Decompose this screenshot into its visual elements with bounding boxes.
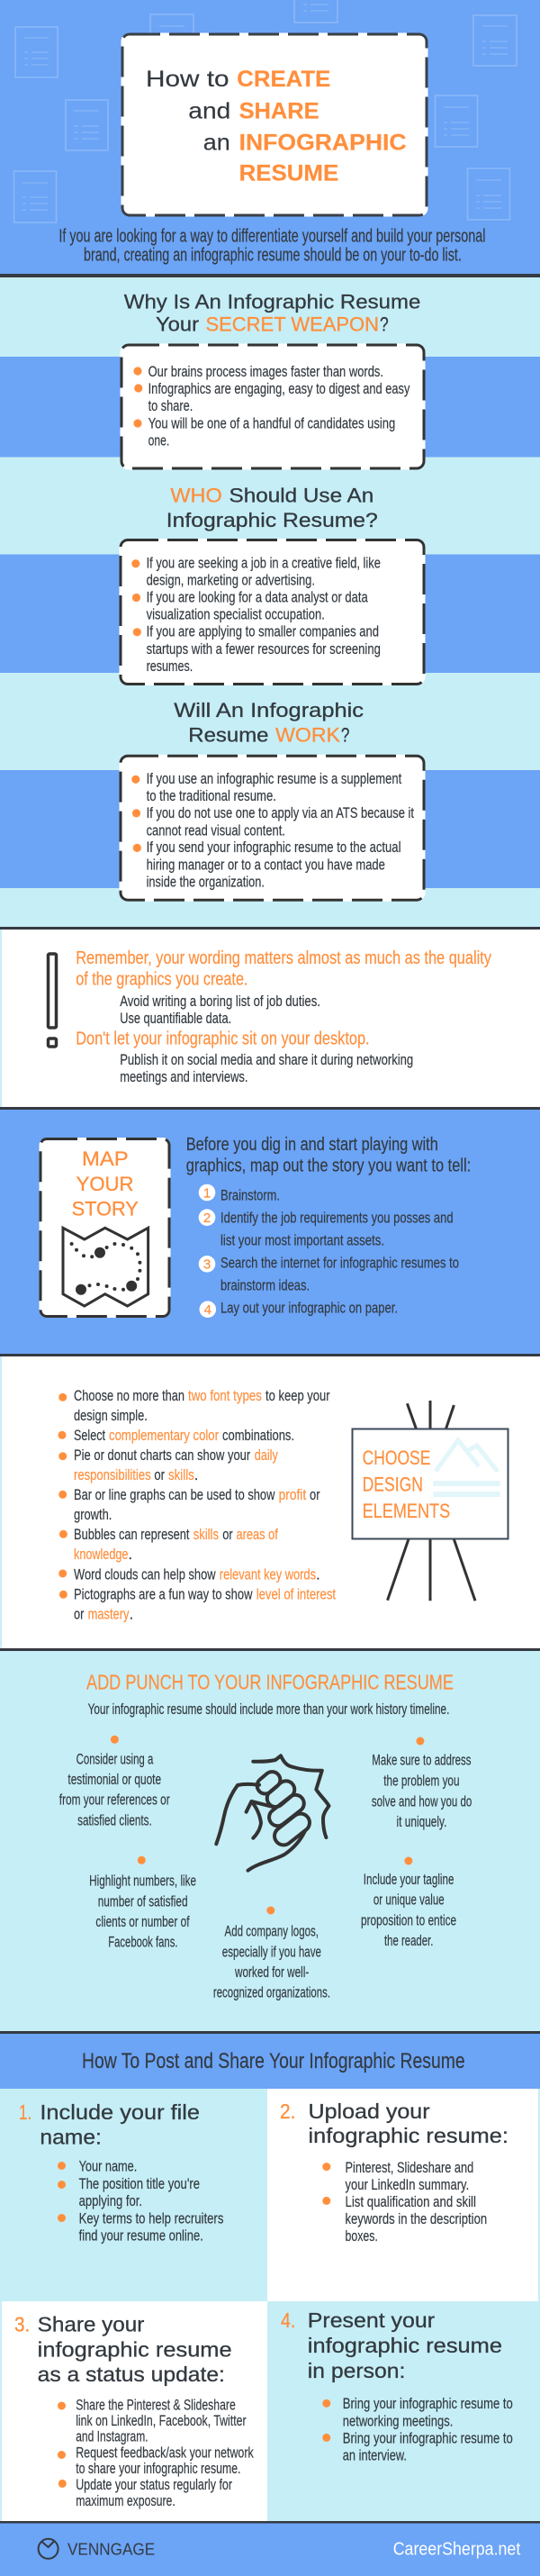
list text: Update your status regularly for: [76, 2476, 232, 2493]
callout: tagline: Include your tagline: [364, 1871, 454, 1888]
title: RESUME: [239, 160, 338, 186]
heading: map your story: MAP: [82, 1147, 129, 1170]
number badges: 4: [204, 1302, 212, 1318]
text block: wording reminder: Avoid writing a boring list of job duties.: [120, 993, 320, 1010]
step heading: [14, 2313, 232, 2386]
list text: If you use an infographic resume is a supplement: [147, 770, 401, 787]
list text: your LinkedIn summary.: [346, 2176, 469, 2193]
list text: [343, 2395, 513, 2463]
list text: [346, 2159, 487, 2245]
heading: choose design elements: [363, 1447, 450, 1522]
icon: faint resume document pattern: [14, 0, 517, 222]
list text: If you are looking for a data analyst or data: [147, 589, 368, 606]
list text: Request feedback/ask your network: [76, 2444, 254, 2462]
step heading: 3.: [14, 2313, 30, 2336]
heading: work: WORK: [275, 723, 340, 746]
title: SHARE: [239, 99, 320, 124]
heading: work: [174, 699, 364, 746]
heading: who: [166, 485, 378, 531]
callout: company logos: Add company logos,: [225, 1922, 319, 1939]
title: CREATE: [237, 67, 330, 92]
list text: [76, 2396, 254, 2509]
text block: wording reminder: meetings and interviews.: [120, 1068, 248, 1085]
list text: find your resume online.: [79, 2227, 203, 2244]
list text: design, marketing or advertising.: [147, 571, 315, 588]
tip text: or: [74, 1605, 85, 1622]
heading: work: ?: [341, 723, 349, 746]
tip text: or: [154, 1466, 165, 1483]
icon: treasure map: [63, 1228, 148, 1306]
callout: company logos: recognized organizations.: [213, 1984, 330, 2001]
callout: testimonial: Consider using a: [76, 1750, 154, 1767]
callout: company logos: worked for well-: [234, 1964, 309, 1981]
list text: link on LinkedIn, Facebook, Twitter: [76, 2412, 247, 2429]
tip text: complementary color: [109, 1427, 219, 1444]
tip text: or: [310, 1486, 320, 1503]
list text: The position title you're: [79, 2175, 200, 2192]
number badges: [199, 1184, 216, 1318]
tip text: skills: [168, 1466, 194, 1483]
callout: address the problem: solve and how you do: [372, 1792, 472, 1810]
footer: careersherpa link: CareerSherpa.net: [393, 2539, 521, 2559]
list text: networking meetings.: [343, 2413, 453, 2430]
list text: to share your infographic resume.: [76, 2460, 241, 2477]
step heading: 4.: [281, 2308, 295, 2332]
heading: secret weapon: Why Is An Infographic Resume: [124, 290, 420, 313]
tip text: or: [222, 1526, 233, 1543]
callout: tagline: [361, 1857, 456, 1949]
callout: company logos: especially if you have: [222, 1943, 321, 1960]
tip text: Word clouds can help show: [74, 1565, 216, 1583]
icon: venngage logo: [39, 2539, 58, 2559]
list text: Our brains process images faster than words.: [148, 363, 383, 380]
heading: who: WHO: [170, 485, 222, 506]
callout: highlight numbers: number of satisfied: [98, 1892, 188, 1909]
heading: secret weapon: SECRET WEAPON: [205, 313, 379, 336]
title: [146, 67, 407, 186]
step text: Brainstorm.: [220, 1186, 280, 1203]
callout: tagline: or unique value: [374, 1891, 445, 1909]
list text: maximum exposure.: [76, 2492, 176, 2509]
step heading: as a status update:: [38, 2363, 225, 2386]
step heading: Share your: [38, 2313, 145, 2336]
step heading: name:: [40, 2125, 102, 2148]
tip text: design simple.: [74, 1407, 148, 1424]
panel: step 2: [280, 2100, 508, 2245]
tip text: daily: [255, 1447, 278, 1464]
step text: Identify the job requirements you posses and: [220, 1210, 454, 1227]
heading: secret weapon: ?: [380, 313, 389, 336]
panel: map your story card: [40, 1138, 169, 1317]
list text: resumes.: [147, 658, 193, 675]
tip text: combinations.: [222, 1427, 294, 1444]
list text: to the traditional resume.: [147, 787, 276, 804]
callout: address the problem: it uniquely.: [396, 1813, 446, 1830]
tip text: relevant key words: [220, 1565, 316, 1583]
tip text: .: [128, 1546, 132, 1563]
callout: highlight numbers: Highlight numbers, like: [89, 1873, 196, 1890]
tip text: Select: [74, 1427, 105, 1444]
icon: raised fist: [216, 1755, 329, 1871]
list text: one.: [148, 432, 169, 449]
step text: Search the internet for infographic resumes to: [220, 1254, 459, 1271]
list text: [147, 555, 381, 675]
list text: If you do not use one to apply via an ATS because it: [147, 804, 414, 821]
bullets: [133, 367, 142, 428]
list text: inside the organization.: [147, 874, 265, 890]
list: numbered steps: [199, 1184, 459, 1318]
bullets: [58, 2401, 67, 2488]
text block: wording reminder: Publish it on social media and share it during networking: [120, 1051, 413, 1068]
callout: testimonial: from your references or: [59, 1791, 170, 1809]
tip text: Choose no more than: [74, 1387, 184, 1404]
heading: work: Resume: [188, 723, 268, 746]
text block: wording reminder: of the graphics you create.: [76, 970, 248, 990]
callout: testimonial: testimonial or quote: [68, 1771, 161, 1788]
step heading: infographic resume: [38, 2338, 232, 2362]
callout: testimonial: [59, 1736, 170, 1828]
tip text: to keep your: [266, 1387, 330, 1404]
tip text: responsibilities: [74, 1466, 151, 1483]
heading: map your story: STORY: [72, 1198, 139, 1220]
list text: If you send your infographic resume to the actual: [147, 839, 401, 856]
list text: to share.: [148, 397, 193, 414]
tip text: knowledge: [74, 1546, 128, 1563]
tip text: profit: [279, 1486, 306, 1503]
number badges: 3: [203, 1257, 211, 1272]
tip text: .: [130, 1605, 133, 1622]
step heading: infographic resume:: [308, 2124, 508, 2147]
list text: If you are applying to smaller companies and: [147, 623, 379, 640]
panel: secret weapon list: [122, 345, 424, 468]
heading: work: Will An Infographic: [174, 699, 364, 721]
callout: company logos: [213, 1906, 330, 2001]
footer: venngage wordmark: VENNGAGE: [68, 2540, 155, 2558]
bullets: [131, 776, 141, 852]
tip text: two font types: [188, 1387, 262, 1404]
tip text: Bubbles can represent: [74, 1526, 190, 1543]
tip text: Pie or donut charts can show your: [74, 1447, 250, 1464]
list text: and Instagram.: [76, 2428, 148, 2445]
heading: map your story: [72, 1147, 139, 1220]
text block: wording reminder: Don't let your infographic sit on your desktop.: [76, 1029, 370, 1049]
text block: map intro: [186, 1135, 471, 1176]
list text: [148, 363, 410, 449]
tip text: mastery: [88, 1605, 130, 1622]
heading: choose design elements: CHOOSE: [363, 1447, 430, 1469]
callout: highlight numbers: [89, 1856, 196, 1951]
tip text: level of interest: [256, 1585, 336, 1602]
tip text: areas of: [236, 1526, 278, 1543]
list text: keywords in the description: [346, 2210, 487, 2227]
step heading: [281, 2308, 502, 2382]
callout: tagline: proposition to entice: [361, 1912, 456, 1929]
list text: [79, 2158, 223, 2244]
callout: address the problem: [372, 1737, 472, 1830]
callout: highlight numbers: Facebook fans.: [108, 1934, 178, 1951]
callout: testimonial: satisfied clients.: [77, 1811, 152, 1828]
icon: easel board: [353, 1401, 508, 1601]
text block: wording reminder: [76, 948, 491, 1085]
callout: tagline: the reader.: [384, 1932, 433, 1949]
tip text: Pictographs are a fun way to show: [74, 1585, 253, 1602]
bullets: [58, 2162, 66, 2222]
callout: highlight numbers: clients or number of: [95, 1913, 190, 1930]
panel: work list: [121, 756, 424, 900]
title: and: [188, 99, 230, 124]
tip text: skills: [194, 1526, 219, 1543]
step heading: in person:: [308, 2359, 405, 2382]
list text: List qualification and skill: [346, 2193, 476, 2210]
title: INFOGRAPHIC: [239, 130, 407, 155]
list text: an interview.: [343, 2446, 407, 2463]
number badges: 1: [203, 1185, 211, 1202]
step heading: Present your: [308, 2308, 435, 2332]
bullets: [58, 1393, 68, 1599]
step heading: Upload your: [308, 2100, 430, 2123]
list text: applying for.: [79, 2192, 142, 2209]
heading: choose design elements: DESIGN: [363, 1474, 423, 1496]
easel legs: [387, 1401, 475, 1601]
text block: wording reminder: Use quantifiable data.: [120, 1010, 231, 1027]
step heading: 2.: [280, 2100, 295, 2123]
list text: Infographics are engaging, easy to digest and easy: [148, 380, 410, 397]
panel: who list: [121, 540, 424, 685]
step text: brainstorm ideas.: [220, 1276, 310, 1293]
step heading: 1.: [19, 2100, 32, 2124]
tip text: [74, 1387, 336, 1622]
step heading: [280, 2100, 508, 2147]
panel: step 1: [19, 2100, 223, 2244]
heading: secret weapon: Your: [156, 313, 199, 336]
list text: boxes.: [346, 2227, 378, 2245]
list text: visualization specialist occupation.: [147, 606, 325, 623]
tip text: Bar or line graphs can be used to show: [74, 1486, 275, 1503]
list text: Key terms to help recruiters: [79, 2209, 223, 2227]
number badges: 2: [203, 1211, 211, 1226]
step heading: Include your file: [40, 2100, 200, 2124]
title: How to: [146, 67, 229, 92]
heading: map your story: YOUR: [76, 1173, 133, 1195]
heading: who: Infographic Resume?: [166, 509, 378, 531]
tip text: growth.: [74, 1506, 112, 1523]
list text: Share the Pinterest & Slideshare: [76, 2396, 236, 2413]
list text: If you are seeking a job in a creative field, like: [147, 555, 381, 571]
heading: secret weapon: [124, 290, 420, 336]
faint mountain graphic: [433, 1440, 500, 1497]
bullets: [322, 2163, 330, 2205]
list text: cannot read visual content.: [147, 821, 285, 839]
list text: hiring manager or to a contact you have made: [147, 856, 385, 874]
heading: choose design elements: ELEMENTS: [363, 1500, 450, 1522]
text block: map intro: graphics, map out the story you want to tell:: [186, 1156, 471, 1176]
step heading: infographic resume: [308, 2334, 502, 2357]
panel: step 3: [14, 2313, 254, 2509]
callout: address the problem: Make sure to address: [372, 1752, 472, 1769]
text block: map intro: Before you dig in and start playing with: [186, 1135, 438, 1155]
tip text: .: [316, 1565, 320, 1583]
step heading: [19, 2100, 200, 2148]
tip text: .: [194, 1466, 199, 1483]
step text: [220, 1186, 459, 1316]
list: design tips: [58, 1387, 336, 1622]
text block: intro: [58, 227, 485, 265]
heading: add punch: ADD PUNCH TO YOUR INFOGRAPHIC RESUME: [86, 1671, 454, 1694]
icon: exclamation mark: [49, 954, 56, 1047]
list text: [147, 770, 414, 890]
list text: You will be one of a handful of candidates using: [148, 414, 395, 431]
list text: Pinterest, Slideshare and: [346, 2159, 473, 2176]
callout: address the problem: the problem you: [383, 1773, 459, 1790]
panel: title card: [122, 34, 427, 215]
step text: Lay out your infographic on paper.: [220, 1299, 398, 1316]
list text: Your name.: [79, 2158, 137, 2175]
bullets: [131, 559, 141, 636]
panel: step 4: [281, 2308, 513, 2463]
list text: startups with a fewer resources for screening: [147, 640, 381, 658]
heading: who: Should Use An: [229, 485, 374, 506]
bullets: [322, 2399, 330, 2442]
step text: list your most important assets.: [220, 1232, 384, 1249]
easel board: [353, 1429, 508, 1538]
title: an: [203, 130, 230, 155]
